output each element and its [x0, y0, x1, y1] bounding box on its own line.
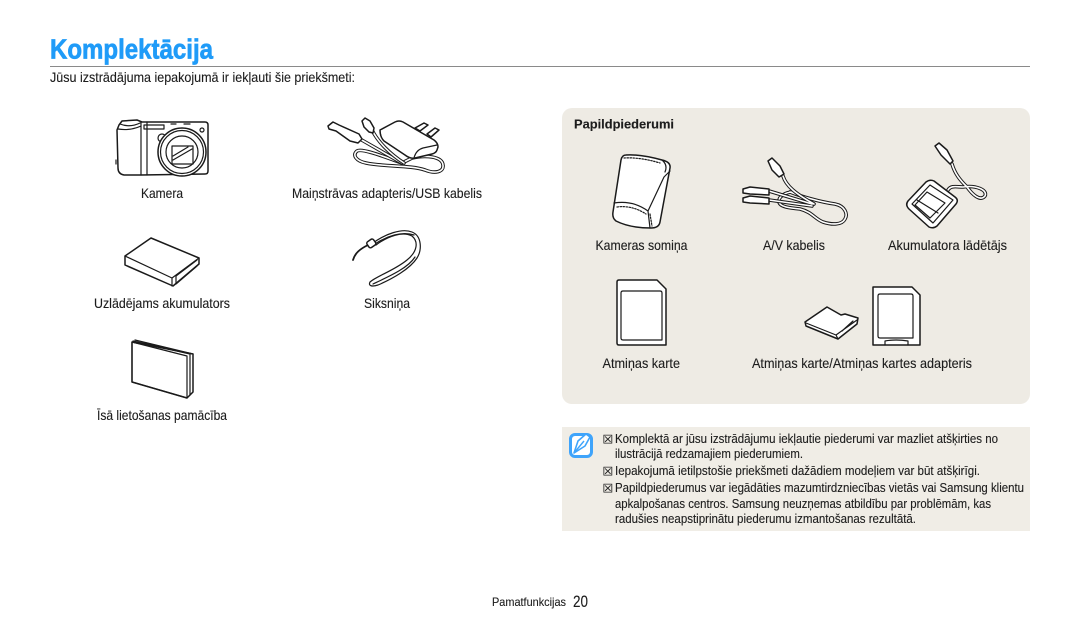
- icon: camera: [116, 120, 208, 176]
- note list: ☒: [602, 432, 613, 446]
- icon: charger: [907, 143, 985, 228]
- icon: card adapter: [873, 287, 920, 345]
- footer: [492, 593, 588, 611]
- panel background: [562, 108, 1030, 404]
- label: Kamera: [141, 185, 183, 201]
- note list: apkalpošanas centros. Samsung neuzņemas atbildību par problēmām, kas: [615, 496, 991, 511]
- label: Atmiņas karte: [602, 355, 680, 371]
- item: adapter and USB cable: [292, 118, 482, 201]
- note panel: [562, 427, 1030, 531]
- icon: micro card: [805, 307, 858, 339]
- item: AV cable: [743, 158, 846, 253]
- note list: [602, 431, 1024, 526]
- note list: ☒: [602, 464, 613, 478]
- label: Siksniņa: [364, 295, 410, 311]
- item: camera: [116, 120, 208, 201]
- icon: AV cable: [743, 158, 846, 224]
- label: Maiņstrāvas adapteris/USB kabelis: [292, 185, 482, 201]
- icon: case: [613, 155, 670, 228]
- icon: adapter and USB cable: [328, 118, 443, 172]
- label: A/V kabelis: [763, 237, 825, 253]
- label: Akumulatora lādētājs: [888, 237, 1007, 253]
- note list: ilustrācijā redzamajiem piederumiem.: [615, 446, 803, 461]
- icon: battery: [125, 238, 199, 286]
- item: battery charger: [888, 143, 1007, 253]
- item: micro card and adapter: [752, 287, 972, 371]
- note list: radušies neapstiprinātu piederumu izmantošanas rezultātā.: [615, 511, 916, 526]
- label: Īsā lietošanas pamācība: [97, 407, 227, 423]
- note list: Iepakojumā ietilpstošie priekšmeti dažādiem modeļiem var būt atšķirīgi.: [615, 463, 980, 478]
- label: Kameras somiņa: [596, 237, 688, 253]
- footer: Pamatfunkcijas: [492, 595, 566, 609]
- note background: [562, 427, 1030, 531]
- item: camera case: [596, 155, 688, 253]
- icon: SD card: [617, 280, 666, 345]
- panel: optional accessories: [562, 108, 1030, 404]
- label: Uzlādējams akumulators: [94, 295, 230, 311]
- note list: Komplektā ar jūsu izstrādājumu iekļautie piederumi var mazliet atšķirties no: [615, 431, 998, 446]
- item: battery: [94, 238, 230, 311]
- item: memory card: [602, 280, 680, 371]
- panel heading: Papildpiederumi: [574, 116, 674, 132]
- item: quick guide: [97, 340, 227, 423]
- icon: note pencil: [570, 434, 592, 456]
- icon: strap: [353, 231, 420, 286]
- intro text: Jūsu izstrādājuma iepakojumā ir iekļauti šie priekšmeti:: [50, 69, 355, 85]
- footer: 20: [573, 593, 588, 611]
- note list: ☒: [602, 482, 613, 496]
- icon: booklet: [132, 340, 193, 398]
- note list: Papildpiederumus var iegādāties mazumtirdzniecības vietās vai Samsung klientu: [615, 480, 1024, 495]
- title: Komplektācija: [50, 34, 214, 64]
- label: Atmiņas karte/Atmiņas kartes adapteris: [752, 355, 972, 371]
- item: strap: [353, 231, 420, 311]
